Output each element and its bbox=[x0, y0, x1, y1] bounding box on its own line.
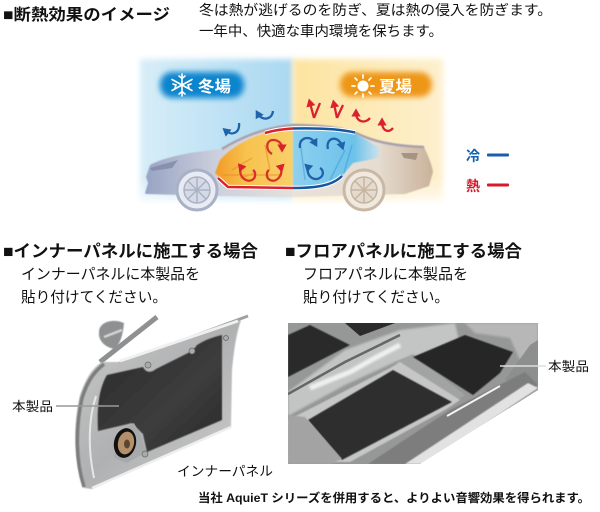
intro text: 一年中、快適な車内環境を保ちます。 bbox=[199, 23, 443, 39]
callout: product label on floor bbox=[500, 359, 589, 374]
roof insulation: blue bbox=[293, 128, 355, 132]
legend: cold and heat bbox=[466, 148, 509, 194]
title: heat insulation image: ■断熱効果のイメージ bbox=[3, 6, 170, 24]
floor panel instructions: フロアパネルに本製品を bbox=[303, 266, 468, 283]
side sill bbox=[368, 372, 538, 464]
arrows: warm cabin circulation bbox=[240, 140, 282, 181]
photo: floor panel bbox=[288, 323, 538, 464]
summer badge: 夏場 bbox=[379, 78, 412, 96]
car illustration bbox=[145, 125, 433, 210]
car body rear half bbox=[293, 125, 433, 197]
caption: inner panel: インナーパネル bbox=[177, 464, 273, 479]
rear wheel bbox=[344, 170, 384, 210]
panel: car insulation diagram bbox=[134, 59, 450, 214]
bolts bbox=[142, 336, 228, 457]
cool cabin bbox=[293, 128, 380, 188]
legend: cold: 冷 bbox=[466, 148, 480, 164]
floor panel instructions: 貼り付けてください。 bbox=[303, 289, 449, 306]
summer background bbox=[293, 59, 443, 201]
window frame bbox=[100, 317, 157, 362]
arrows: summer outside bbox=[310, 103, 393, 131]
heading: inner panel: ■インナーパネルに施工する場合 bbox=[3, 242, 258, 261]
seat crossmember bbox=[397, 354, 464, 398]
top dark area bbox=[345, 323, 395, 336]
icon: sun bbox=[352, 75, 374, 97]
winter badge: 冬場 bbox=[198, 77, 231, 96]
callout: product label on floor: 本製品 bbox=[548, 359, 589, 374]
front wheel bbox=[177, 170, 217, 210]
footnote: 当社 AquieT シリーズを併用すると、よりよい音響効果を得られます。 bbox=[198, 490, 590, 505]
arrows: cool cabin circulation bbox=[300, 138, 342, 179]
left beam bbox=[288, 415, 342, 464]
arrows: winter outside bbox=[226, 111, 273, 133]
warm cabin bbox=[215, 128, 293, 188]
photo: door inner panel bbox=[75, 316, 248, 489]
intro text bbox=[199, 2, 552, 39]
white corner outside the photo bbox=[420, 390, 538, 464]
floor insulation: blue bbox=[293, 176, 342, 188]
winter background bbox=[140, 59, 293, 201]
intro text: 冬は熱が逃げるのを防ぎ、夏は熱の侵入を防ぎます。 bbox=[199, 2, 552, 18]
insulation white outlines bbox=[218, 128, 355, 188]
upper left carpet bbox=[288, 325, 350, 377]
center tunnel bbox=[288, 323, 460, 416]
heading: floor panel: ■フロアパネルに施工する場合 bbox=[285, 242, 522, 261]
black insulation sheet bbox=[98, 335, 222, 452]
callout: product label on door bbox=[12, 399, 119, 414]
speaker bbox=[111, 423, 146, 463]
legend: heat: 熱 bbox=[466, 178, 480, 194]
door mirror bbox=[99, 321, 124, 349]
floor panel instructions bbox=[303, 266, 468, 306]
roof insulation: red bbox=[265, 128, 293, 133]
callout: product label on door: 本製品 bbox=[12, 399, 53, 414]
door shell bbox=[75, 320, 241, 489]
inner panel instructions bbox=[21, 266, 200, 306]
upper right insulation bbox=[413, 335, 513, 395]
floor insulation: red bbox=[218, 178, 293, 188]
summer badge bbox=[340, 72, 432, 97]
lower floor insulation bbox=[308, 370, 452, 460]
car body front half bbox=[145, 125, 293, 197]
inner panel instructions: インナーパネルに本製品を bbox=[21, 266, 200, 283]
headlight and tail light bbox=[150, 160, 178, 171]
winter badge bbox=[160, 72, 244, 98]
icon: snowflake bbox=[172, 74, 192, 96]
inner panel instructions: 貼り付けてください。 bbox=[21, 289, 167, 306]
